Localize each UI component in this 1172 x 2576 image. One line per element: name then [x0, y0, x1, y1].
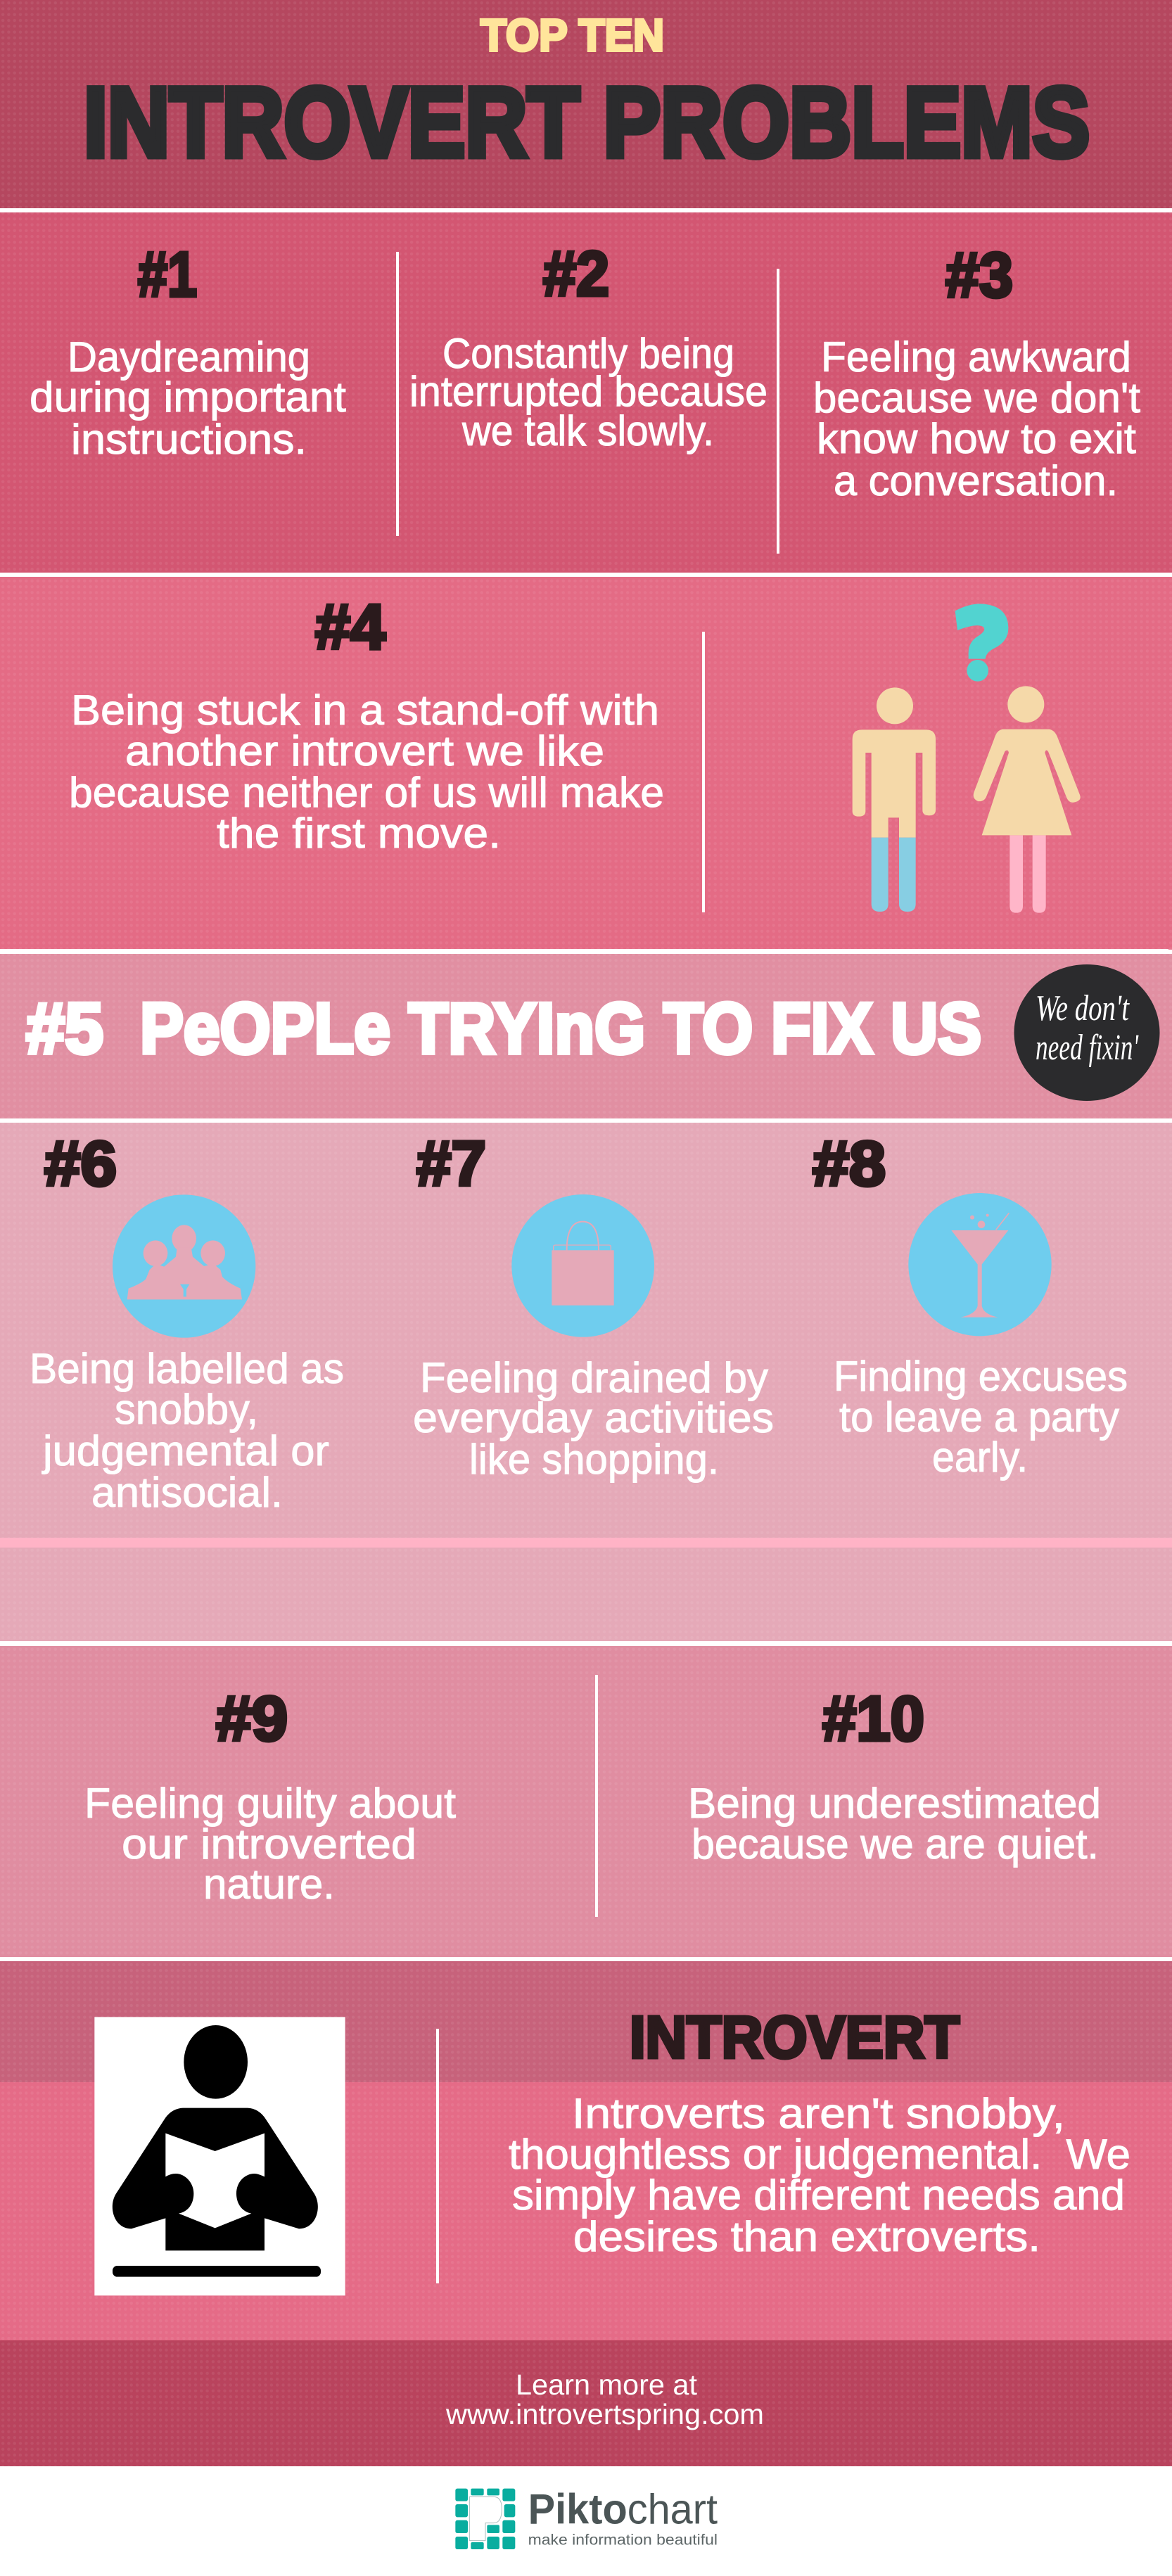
icon: woman — [974, 686, 1081, 913]
problem 7: Feeling drained by — [420, 1354, 768, 1401]
problem 3: #3 — [945, 241, 1013, 311]
definition text: desires than extroverts. — [573, 2213, 1040, 2260]
problem 3: a conversation. — [834, 457, 1118, 504]
icon: logo tiles — [455, 2489, 515, 2549]
problem 1: instructions. — [71, 416, 307, 463]
panel: header — [0, 0, 1172, 209]
problem 2: Constantly being — [442, 330, 734, 377]
problem 1: during important — [30, 374, 346, 421]
panel: problems 9 and 10 — [0, 1646, 1172, 1957]
problem 10: Being underestimated — [688, 1780, 1101, 1827]
problem 4 text — [69, 592, 664, 857]
problem 9: our introverted — [122, 1821, 416, 1868]
problem 6: judgemental or — [42, 1427, 329, 1474]
problem 1: #1 — [138, 240, 197, 310]
problem 7: like shopping. — [469, 1436, 719, 1483]
problem 8: to leave a party — [839, 1394, 1119, 1441]
logo tagline: make information beautiful — [528, 2532, 718, 2549]
panel: problems 6 to 8 — [0, 1123, 1172, 1641]
problem 4 text: another introvert we like — [125, 727, 604, 774]
problem 6: Being labelled as — [30, 1345, 344, 1392]
problem 6: antisocial. — [91, 1469, 283, 1516]
link text: Learn more at — [516, 2368, 698, 2401]
heading: problem 5: PeOPLe TRYInG TO FIX US — [140, 988, 981, 1069]
icon: shopping bag — [511, 1194, 654, 1337]
problem 9: #9 — [216, 1684, 288, 1754]
definition text: thoughtless or judgemental. We — [509, 2131, 1130, 2178]
panel: problems 1 to 3 — [0, 212, 1172, 573]
problem 4 text: #4 — [315, 592, 386, 663]
problem 10: #10 — [822, 1684, 924, 1754]
problem 9 — [84, 1684, 456, 1908]
icon: cocktail glass — [908, 1193, 1052, 1336]
problem 7: everyday activities — [413, 1394, 774, 1441]
problem 2 — [409, 239, 767, 454]
callout: we don't need fixin': We don't — [1036, 988, 1130, 1028]
problem 7 — [413, 1129, 774, 1483]
problem 2: #2 — [543, 239, 609, 310]
problem 8 — [813, 1129, 1128, 1481]
problem 1: Daydreaming — [68, 333, 310, 381]
problem 2: interrupted because — [409, 368, 767, 415]
logo wordmark: Piktochart — [528, 2486, 718, 2533]
problem 3: because we don't — [813, 374, 1140, 421]
problem 4 text: Being stuck in a stand-off with — [71, 687, 659, 734]
icon: man and woman with question mark — [853, 604, 1081, 913]
problem 6 — [30, 1129, 344, 1516]
problem 3: Feeling awkward — [821, 333, 1131, 381]
link text: www.introvertspring.com — [445, 2398, 764, 2430]
problem 10: because we are quiet. — [692, 1821, 1099, 1868]
problem 9: nature. — [203, 1861, 335, 1908]
problem 2: we talk slowly. — [461, 407, 714, 454]
definition text — [509, 2090, 1130, 2260]
problem 6: #6 — [44, 1129, 117, 1199]
heading: problem 5: #5 — [26, 988, 103, 1069]
definition text: simply have different needs and — [512, 2172, 1125, 2219]
problem 8: #8 — [813, 1129, 886, 1199]
problem 8: early. — [932, 1434, 1028, 1481]
problem 10 — [688, 1684, 1101, 1868]
heading: top ten: TOP TEN — [480, 10, 664, 60]
logo: Piktochart — [455, 2486, 718, 2549]
icon: man — [853, 687, 936, 912]
problem 4 text: the first move. — [217, 810, 501, 857]
problem 1 — [30, 240, 346, 463]
icon: group of people — [113, 1194, 255, 1338]
problem 3: know how to exit — [817, 415, 1136, 462]
problem 3 — [813, 241, 1140, 504]
problem 7: #7 — [416, 1129, 486, 1199]
callout: we don't need fixin' — [1014, 964, 1159, 1101]
problem 8: Finding excuses — [834, 1353, 1128, 1400]
panel: problem 5 — [0, 954, 1172, 1118]
panel: problem 4 — [0, 577, 1172, 950]
panel: introvert definition — [0, 1961, 1172, 2340]
heading: introvert: INTROVERT — [630, 2004, 960, 2070]
panel: learn more footer — [0, 2340, 1172, 2466]
link text — [445, 2368, 764, 2430]
problem 4 text: because neither of us will make — [69, 769, 664, 816]
problem 6: snobby, — [115, 1386, 258, 1433]
definition text: Introverts aren't snobby, — [572, 2090, 1065, 2137]
icon: question mark — [955, 604, 1008, 682]
problem 9: Feeling guilty about — [84, 1780, 456, 1827]
icon: person reading a book — [94, 2017, 345, 2295]
